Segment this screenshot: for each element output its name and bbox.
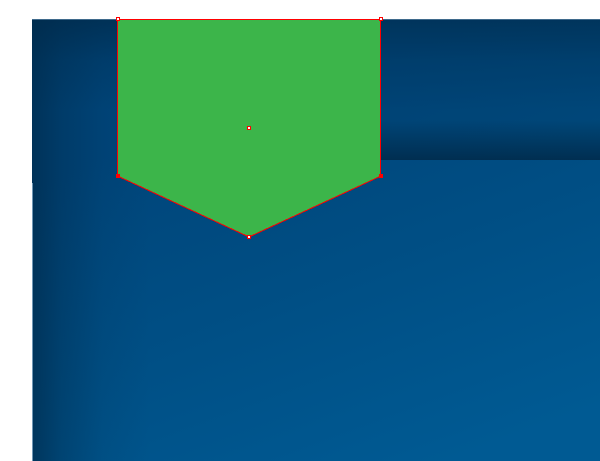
handle: center point bbox=[248, 126, 250, 130]
handle: left corner bbox=[116, 174, 120, 178]
handle: right corner bbox=[379, 174, 383, 178]
handle: bottom tip bbox=[248, 236, 250, 238]
handle: top right bbox=[380, 18, 382, 20]
handle: top left bbox=[116, 18, 120, 20]
shape: green pentagon banner with selection outline bbox=[116, 18, 383, 238]
